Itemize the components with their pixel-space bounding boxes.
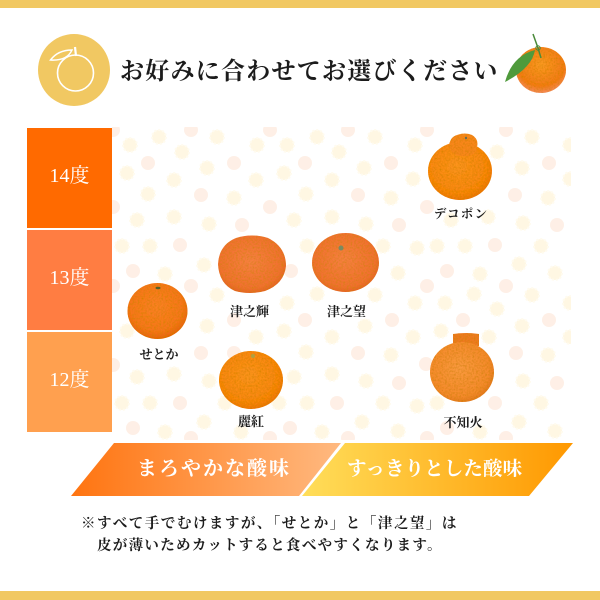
background dot pattern [106, 123, 577, 445]
panel: 13度: 13度 [50, 265, 90, 289]
banner: まろやかな酸味: まろやかな酸味 [137, 457, 291, 480]
label: 津之望: 津之望 [327, 304, 366, 319]
icon: watercolour mandarin [505, 34, 566, 93]
label: デコポン: デコポン [434, 207, 488, 221]
top band [0, 0, 600, 8]
banner: まろやかな酸味 [71, 443, 341, 496]
note text: 皮が薄いためカットすると食べやすくなります。 [97, 536, 443, 554]
icon: fruit badge [38, 34, 110, 106]
banner: すっきりとした酸味 [302, 443, 573, 496]
fruit: 不知火 [430, 333, 494, 430]
note text: ※すべて手でむけますが、「せとか」と「津之望」は [81, 514, 458, 532]
title: お好みに合わせてお選びください [120, 58, 499, 85]
label: 不知火: 不知火 [443, 415, 483, 430]
label: 津之輝: 津之輝 [230, 304, 269, 319]
panel: 12度 [27, 332, 112, 432]
panel: 14度 [27, 128, 112, 228]
note text [81, 514, 458, 554]
label: せとか: せとか [139, 347, 179, 362]
fruit: デコポン [428, 134, 492, 221]
panel: 14度: 14度 [50, 163, 90, 187]
fruit: 麗紅 [219, 351, 283, 429]
fruit: 津之望 [312, 233, 379, 319]
bottom band [0, 591, 600, 600]
panel: 12度: 12度 [50, 367, 90, 391]
fruit: せとか [128, 283, 188, 362]
label: 麗紅: 麗紅 [238, 414, 264, 429]
banner: すっきりとした酸味: すっきりとした酸味 [347, 458, 523, 480]
fruit: 津之輝 [218, 236, 286, 319]
panel: 13度 [27, 230, 112, 330]
